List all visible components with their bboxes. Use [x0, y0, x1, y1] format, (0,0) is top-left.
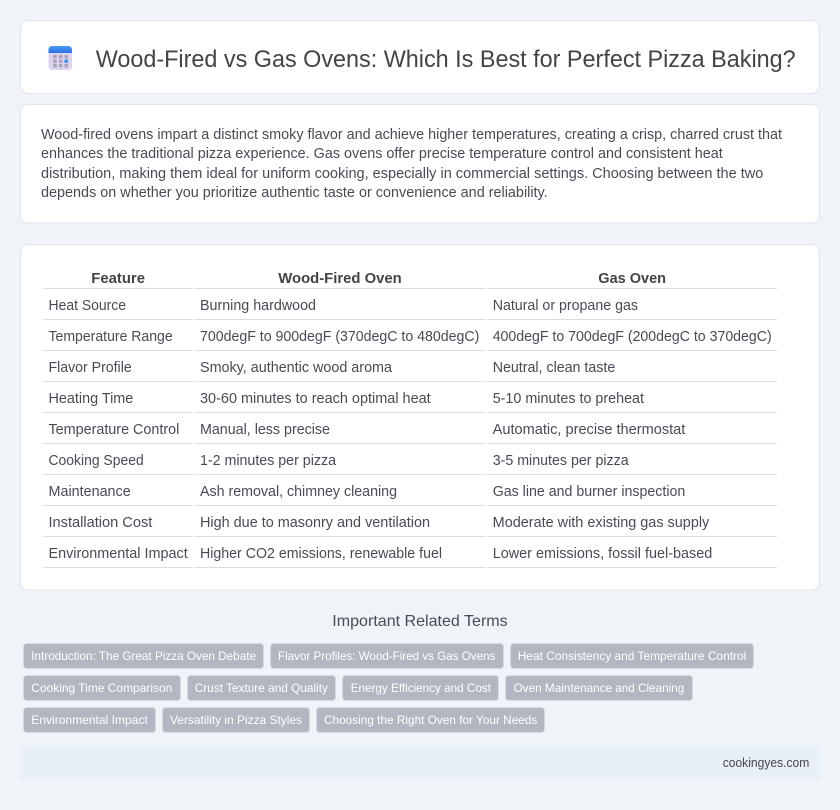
row: heating time: 5-10 minutes to preheat	[493, 391, 644, 407]
row: temperature range: 400degF to 700degF (200degC to 370degC)	[493, 329, 772, 345]
row: heating time: 30-60 minutes to reach optimal heat	[200, 391, 431, 407]
row: cooking speed: Cooking Speed	[48, 453, 144, 469]
table header row: Gas Oven	[598, 270, 666, 287]
row: flavor profile: Smoky, authentic wood aroma	[200, 360, 392, 376]
icon: calendar	[48, 46, 72, 70]
row: heat source	[48, 298, 638, 314]
table header row	[91, 270, 666, 287]
tag: Flavor Profiles: Wood-Fired vs Gas Ovens	[278, 649, 495, 663]
row: environmental impact: Higher CO2 emissions, renewable fuel	[200, 546, 442, 562]
row: maintenance	[48, 484, 685, 500]
row: environmental impact: Environmental Impact	[48, 546, 188, 562]
tag	[316, 708, 544, 732]
tag: Cooking Time Comparison	[31, 681, 172, 695]
row: temperature range: 700degF to 900degF (370degC to 480degC)	[200, 329, 479, 345]
row: temperature control	[48, 422, 685, 438]
row: installation cost: Moderate with existing gas supply	[493, 515, 710, 531]
row: heating time: Heating Time	[48, 391, 133, 407]
panel: introduction	[20, 104, 820, 223]
intro paragraph: distribution, making them ideal for uniform cooking, especially in commercial settings. Choosing between the two	[41, 166, 763, 182]
tag	[24, 676, 180, 700]
row: cooking speed: 1-2 minutes per pizza	[200, 453, 336, 469]
section heading: related terms: Important Related Terms	[332, 613, 508, 630]
table header row: Wood-Fired Oven	[278, 270, 402, 287]
row: environmental impact: Lower emissions, fossil fuel-based	[493, 546, 712, 562]
tag: Heat Consistency and Temperature Control	[518, 649, 746, 663]
intro paragraph: Wood-fired ovens impart a distinct smoky flavor and achieve higher temperatures, creating a crisp, charred crust that	[41, 127, 782, 143]
row: flavor profile: Flavor Profile	[48, 360, 132, 376]
tag	[188, 676, 336, 700]
row: installation cost: Installation Cost	[48, 515, 152, 531]
tag: Crust Texture and Quality	[195, 681, 328, 695]
panel: comparison table	[20, 244, 820, 590]
tag: Environmental Impact	[31, 713, 148, 727]
row: cooking speed	[48, 453, 629, 469]
row: installation cost: High due to masonry and ventilation	[200, 515, 430, 531]
tag	[510, 644, 754, 668]
row: maintenance: Gas line and burner inspection	[493, 484, 685, 500]
footer source text: cookingyes.com	[723, 756, 809, 770]
tag: Energy Efficiency and Cost	[351, 681, 492, 695]
title: Wood-Fired vs Gas Ovens: Which Is Best for Perfect Pizza Baking?	[96, 46, 796, 73]
tag: Oven Maintenance and Cleaning	[514, 681, 684, 695]
tag: Choosing the Right Oven for Your Needs	[324, 713, 537, 727]
row: temperature control: Manual, less precise	[200, 422, 330, 438]
tag	[270, 644, 504, 668]
intro paragraph: depends on whether you prioritize authentic taste or convenience and reliability.	[41, 185, 548, 201]
tag: Introduction: The Great Pizza Oven Debate	[31, 649, 256, 663]
row: maintenance: Maintenance	[48, 484, 131, 500]
row: temperature range	[48, 329, 772, 345]
related term tags	[24, 644, 754, 732]
tag: Versatility in Pizza Styles	[170, 713, 302, 727]
row: cooking speed: 3-5 minutes per pizza	[493, 453, 629, 469]
row: heat source: Natural or propane gas	[493, 298, 638, 314]
row: maintenance: Ash removal, chimney cleaning	[200, 484, 397, 500]
tag	[24, 708, 156, 732]
intro paragraph: enhances the traditional pizza experience. Gas ovens offer precise temperature control and consistent heat	[41, 146, 723, 162]
row: heat source: Heat Source	[48, 298, 126, 314]
tag	[162, 708, 310, 732]
row: environmental impact	[48, 546, 712, 562]
tag	[342, 676, 498, 700]
row: temperature control: Automatic, precise thermostat	[493, 422, 685, 438]
row: flavor profile	[48, 360, 615, 376]
table header row: Feature	[91, 270, 145, 287]
footer	[20, 746, 820, 780]
header panel	[20, 20, 820, 94]
row: flavor profile: Neutral, clean taste	[493, 360, 615, 376]
intro paragraph	[41, 127, 782, 201]
tag	[506, 676, 692, 700]
row: heat source: Burning hardwood	[200, 298, 316, 314]
row: installation cost	[48, 515, 710, 531]
row: heating time	[48, 391, 644, 407]
tag	[24, 644, 264, 668]
row: temperature control: Temperature Control	[48, 422, 179, 438]
row: temperature range: Temperature Range	[48, 329, 173, 345]
